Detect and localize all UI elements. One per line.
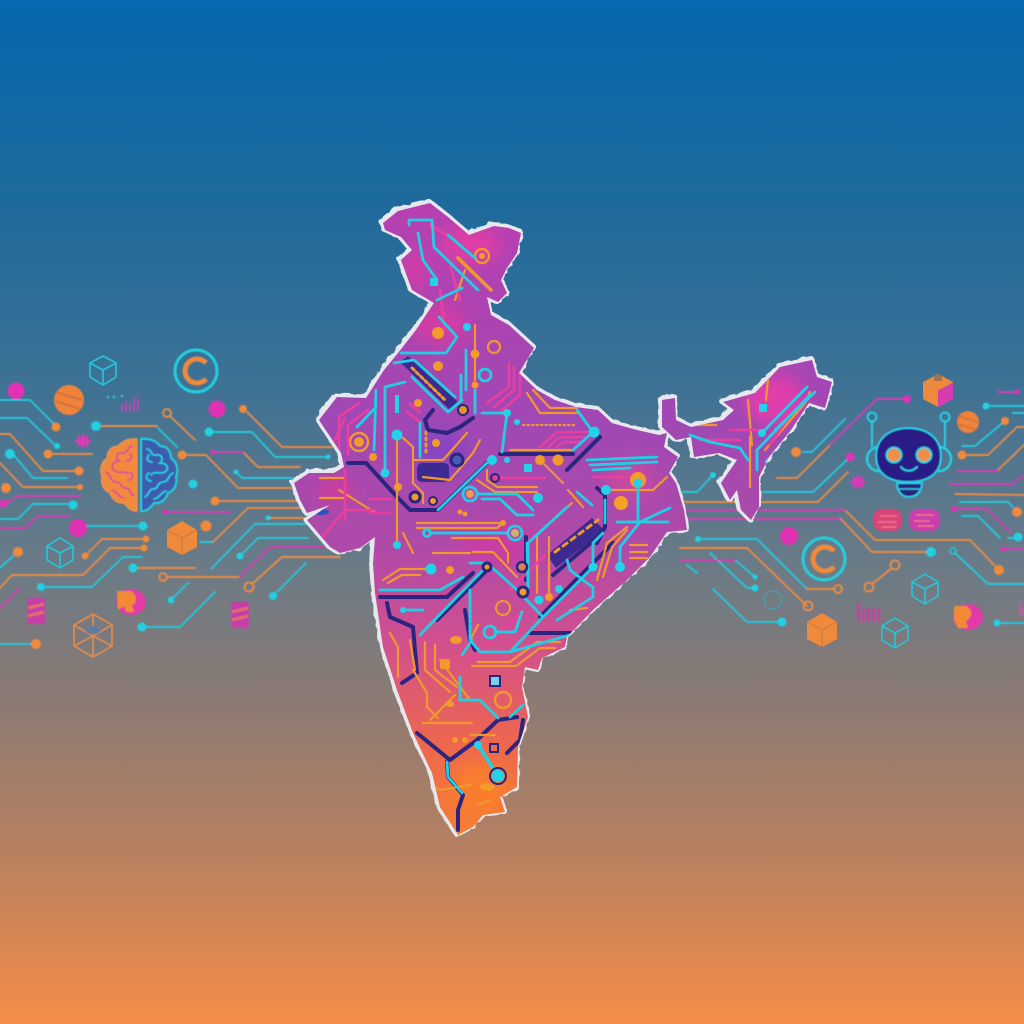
map: navy buses	[348, 410, 613, 830]
icon: cyan cube right lower	[882, 618, 908, 648]
icon: striped orange ball left	[54, 385, 84, 415]
icon: partial bar chart at right edge	[1019, 600, 1024, 616]
icon: orange magenta glyph left	[116, 589, 146, 615]
icon: robot head	[867, 412, 951, 497]
left circuit network	[0, 382, 340, 649]
map: magenta traces	[320, 225, 790, 660]
icon: small bar chart right	[857, 603, 880, 622]
icon: wireframe hexagon with eye	[74, 614, 112, 657]
icon: chip brains right	[873, 509, 940, 531]
icon: dashed circle right	[764, 591, 782, 609]
icon: gradient cylinder right of left cluster	[231, 602, 249, 628]
right circuit network	[680, 390, 1024, 626]
icon: orange cube right	[807, 613, 837, 647]
map: white rough outline	[293, 202, 831, 834]
map: colored fill and circuit traces	[285, 195, 840, 840]
icon: striped orange ball right	[957, 411, 979, 433]
map: orange traces	[320, 249, 810, 805]
icon: gradient cylinder left	[27, 598, 45, 624]
map: bold node accents	[313, 405, 628, 784]
map of India	[285, 195, 840, 840]
map: cyan nodes	[380, 278, 773, 782]
icon: cyan cube top left	[90, 356, 116, 385]
map: cyan traces	[357, 220, 815, 793]
icon: copyright symbol right	[803, 538, 845, 580]
icon: copyright symbol left	[175, 350, 217, 392]
icon: star burst right	[849, 474, 867, 490]
icon: orange magenta glyph right	[953, 604, 983, 630]
icon: cyan cube left	[47, 538, 73, 568]
icon: small bar chart left	[107, 395, 139, 412]
icon: orange cube left	[167, 521, 197, 555]
icon: brain	[101, 439, 177, 511]
icon: orange magenta cube top right	[923, 374, 953, 407]
icon: cyan cube right upper	[912, 574, 938, 604]
map: dark band details	[400, 356, 604, 568]
icon: star burst left	[74, 433, 92, 449]
map: orange nodes	[354, 253, 646, 791]
